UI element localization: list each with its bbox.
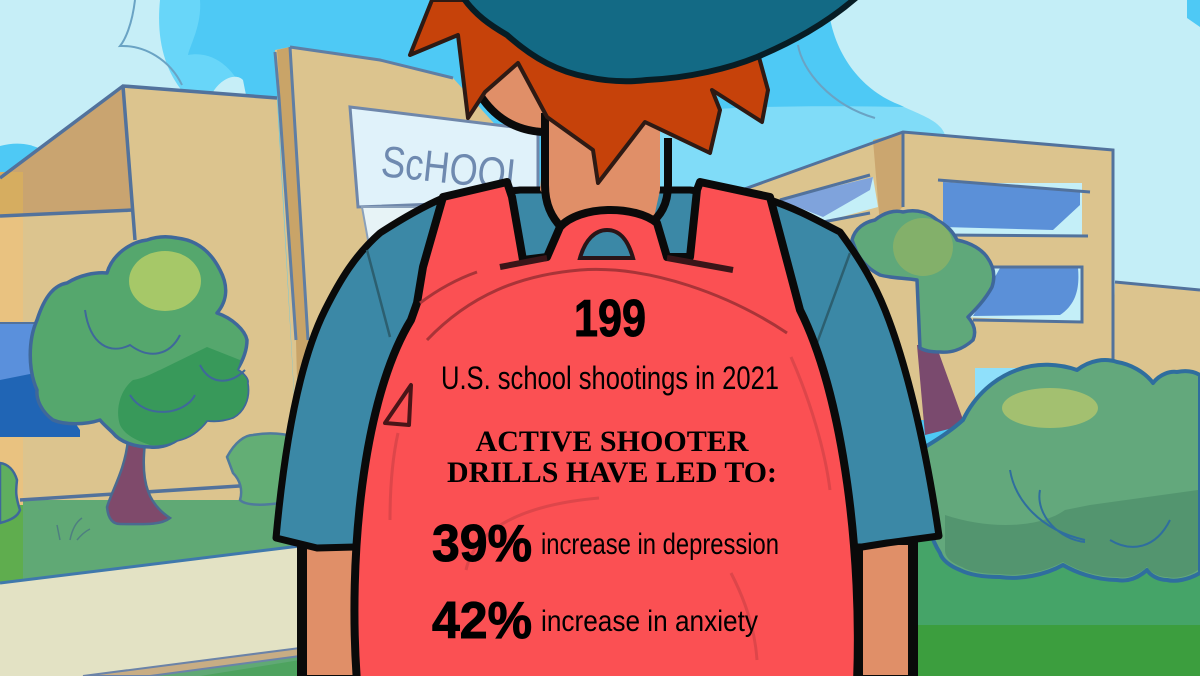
- heading: active shooter drills: DRILLS HAVE LED TO:: [447, 456, 777, 489]
- statistic: depression: 39%: [432, 515, 532, 573]
- statistic: 199 school shootings: [441, 290, 779, 396]
- handle opening: [580, 230, 633, 258]
- right bush: [925, 360, 1200, 581]
- left tree: [30, 237, 248, 524]
- backpack body with straps and handle: [354, 182, 858, 676]
- shirt: [276, 190, 939, 548]
- arms: [302, 540, 913, 676]
- student figure: [276, 0, 939, 676]
- statistic: 199 school shootings: U.S. school shootings in 2021: [441, 360, 779, 396]
- statistic: depression: [432, 515, 779, 573]
- cap: [462, 0, 858, 81]
- shirt fold lines: [367, 250, 850, 343]
- pocket arcs: [420, 269, 787, 340]
- right school building: [700, 132, 1200, 430]
- middle school building: [275, 47, 500, 500]
- ground: grass and sidewalk: [0, 480, 1200, 676]
- statistic: anxiety: 42%: [432, 592, 532, 650]
- backpack zipper tag: [385, 385, 411, 425]
- faint pack creases: [390, 357, 830, 660]
- head and neck: [480, 55, 660, 222]
- statistic: depression: increase in depression: [541, 528, 779, 561]
- heading: active shooter drills: ACTIVE SHOOTER: [476, 425, 749, 458]
- strap seams and pocket lines: [500, 258, 733, 270]
- right tree: [852, 211, 994, 435]
- heading: active shooter drills: [447, 425, 777, 489]
- neck outlines: [480, 95, 668, 228]
- school sign: [350, 107, 538, 240]
- school sign: ScHOOL: [379, 137, 528, 201]
- left small bushes: [0, 434, 295, 523]
- statistic: anxiety: increase in anxiety: [541, 605, 758, 638]
- hair: [410, 0, 768, 183]
- left school building: [0, 86, 300, 505]
- statistic: anxiety: [432, 592, 758, 650]
- statistic: 199 school shootings: 199: [574, 290, 646, 348]
